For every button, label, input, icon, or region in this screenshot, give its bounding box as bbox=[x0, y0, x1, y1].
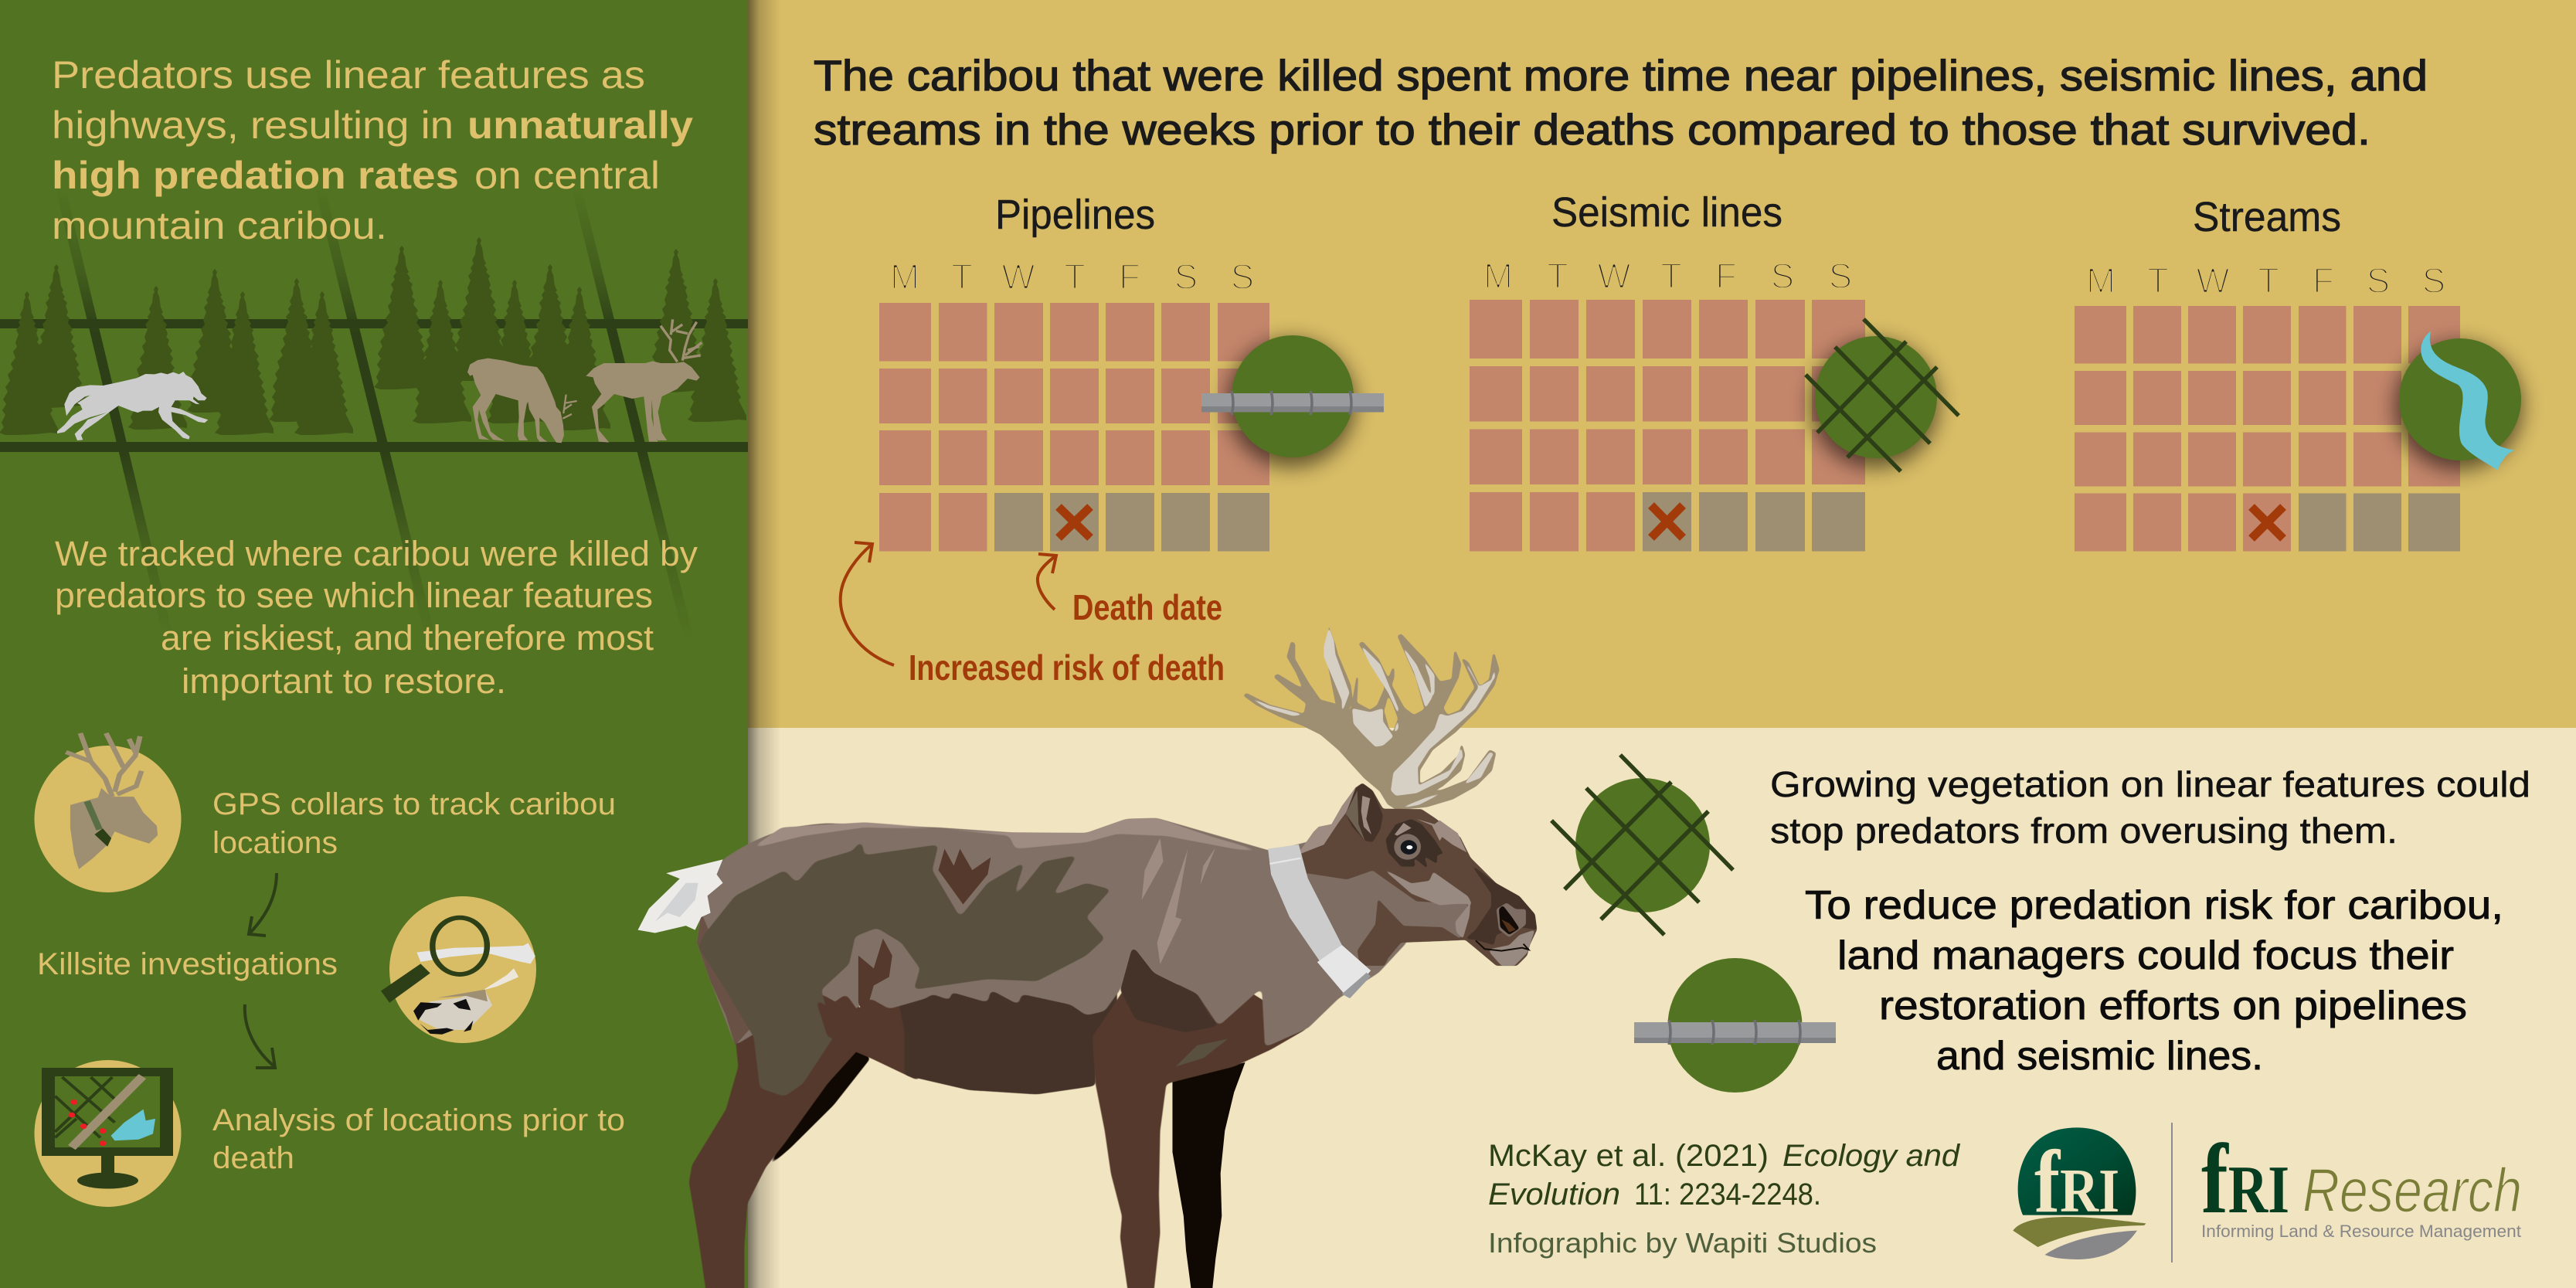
icon: running wolf bbox=[57, 372, 208, 440]
logo: fRI Research bbox=[2013, 1123, 2522, 1263]
icon: standing caribou bbox=[586, 319, 702, 443]
death date X bbox=[2251, 507, 2283, 539]
icon: pipeline circle bbox=[1201, 335, 1384, 467]
text block: predators use linear features: Predators use linear features as bbox=[52, 53, 645, 97]
weekday labels: W bbox=[2196, 260, 2230, 301]
heading: results statement bbox=[814, 51, 2428, 154]
background: green methods panel bbox=[0, 0, 748, 1288]
weekday labels: M bbox=[2086, 260, 2116, 301]
text block: we tracked where caribou were killed bbox=[55, 534, 698, 701]
text block: to reduce predation risk bbox=[1805, 883, 2503, 1079]
logo wordmark bbox=[2201, 1123, 2522, 1241]
icon: spruce trees bbox=[0, 237, 746, 435]
text block: predators use linear features: on central bbox=[474, 154, 660, 197]
weekday labels: T bbox=[1660, 256, 1682, 296]
callout: death date bbox=[1038, 554, 1222, 627]
weekday labels: F bbox=[2313, 260, 2334, 301]
arrow: collars to killsite bbox=[249, 873, 277, 936]
logo emblem bbox=[2013, 1127, 2146, 1259]
weekday labels: W bbox=[1597, 256, 1631, 296]
calendar grid bbox=[1470, 300, 1865, 552]
logo wordmark: Informing Land & Resource Management bbox=[2201, 1222, 2521, 1241]
weekday labels: S bbox=[1231, 257, 1254, 297]
text block: predators use linear features: unnaturally bbox=[467, 104, 693, 147]
text: analysis of locations bbox=[212, 1103, 625, 1175]
credit: Infographic by Wapiti Studios bbox=[1488, 1227, 1877, 1259]
weekday labels bbox=[1483, 256, 1852, 296]
death date X bbox=[1059, 507, 1090, 538]
text: GPS collars bbox=[212, 787, 616, 860]
weekday labels: T bbox=[1064, 257, 1086, 297]
weekday labels: S bbox=[2367, 260, 2390, 301]
text block: growing vegetation: Growing vegetation on linear features could bbox=[1770, 764, 2530, 804]
text block: we tracked where caribou were killed: predators to see which linear features bbox=[55, 576, 653, 615]
illustration: collared caribou bbox=[638, 627, 1537, 1288]
icon: seismic lines circle bbox=[1806, 319, 1959, 471]
citation: McKay et al. (2021) bbox=[1488, 1139, 1769, 1173]
heading: streams: Streams bbox=[2193, 194, 2341, 240]
caribou head and antlers bbox=[1244, 627, 1537, 966]
text block: to reduce predation risk: restoration efforts on pipelines bbox=[1879, 984, 2467, 1028]
GPS collar bbox=[1268, 845, 1371, 998]
weekday labels: S bbox=[1174, 257, 1198, 297]
calendar grid bbox=[2075, 306, 2460, 552]
weekday labels: M bbox=[890, 257, 919, 297]
icon: magnifier over bones and skull bbox=[381, 896, 536, 1043]
weekday labels: F bbox=[1119, 257, 1140, 297]
heading: pipelines: Pipelines bbox=[995, 192, 1155, 238]
text block: to reduce predation risk: land managers could focus their bbox=[1837, 933, 2454, 978]
icon: monitor with map in gold circle bbox=[34, 1060, 181, 1207]
background: gold results panel bbox=[748, 0, 2576, 728]
weekday labels: S bbox=[1771, 256, 1794, 296]
text: GPS collars: GPS collars to track caribou bbox=[212, 787, 616, 821]
heading: results statement: The caribou that were killed spent more time near pipelines, seismic lines, and bbox=[814, 51, 2428, 100]
citation: 11: 2234-2248. bbox=[1634, 1178, 1821, 1212]
citation: Ecology and bbox=[1782, 1139, 1961, 1173]
panel: streams calendar bbox=[2075, 194, 2523, 552]
weekday labels: W bbox=[1001, 257, 1035, 297]
panel: seismic lines calendar bbox=[1470, 189, 1959, 552]
weekday labels: T bbox=[951, 257, 973, 297]
text block: predators use linear features: high predation rates bbox=[52, 154, 459, 197]
weekday labels: T bbox=[2258, 260, 2279, 301]
weekday labels bbox=[890, 257, 1254, 297]
weekday labels: T bbox=[2147, 260, 2169, 301]
weekday labels: S bbox=[2422, 260, 2445, 301]
text block: to reduce predation risk: To reduce predation risk for caribou, bbox=[1805, 883, 2503, 928]
death date X bbox=[1651, 505, 1683, 538]
icon: grazing caribou bbox=[467, 359, 577, 443]
background: cream recommendations panel bbox=[748, 728, 2576, 1288]
text block: we tracked where caribou were killed: We tracked where caribou were killed by bbox=[55, 534, 698, 573]
icon: seismic lines restoration circle bbox=[1551, 755, 1733, 935]
callout: increased risk of death: Increased risk of death bbox=[909, 647, 1225, 688]
text block: predators use linear features: mountain caribou. bbox=[52, 204, 387, 247]
weekday labels: S bbox=[1829, 256, 1852, 296]
icon: stream circle bbox=[2394, 331, 2523, 471]
heading: seismic lines: Seismic lines bbox=[1551, 189, 1782, 236]
text block: growing vegetation: stop predators from overusing them. bbox=[1770, 811, 2398, 851]
weekday labels: M bbox=[1483, 256, 1513, 296]
panel: pipelines calendar bbox=[879, 192, 1384, 552]
text: GPS collars: locations bbox=[212, 826, 338, 860]
text block: predators use linear features bbox=[52, 53, 693, 247]
logo emblem: fRI bbox=[2034, 1133, 2119, 1231]
text block: to reduce predation risk: and seismic lines. bbox=[1936, 1034, 2263, 1079]
panel: linear features forest scene bbox=[0, 189, 748, 639]
calendar grid bbox=[879, 303, 1269, 552]
icon: collared caribou in gold circle bbox=[34, 733, 181, 892]
logo wordmark: Research bbox=[2302, 1156, 2522, 1225]
text block: growing vegetation bbox=[1770, 764, 2530, 851]
heading: results statement: streams in the weeks prior to their deaths compared to those that survived. bbox=[814, 105, 2370, 154]
text: analysis of locations: Analysis of locations prior to bbox=[212, 1103, 625, 1137]
arrow: killsite to analysis bbox=[245, 1004, 275, 1068]
logo wordmark: fRI bbox=[2201, 1123, 2289, 1234]
callout: increased risk of death bbox=[841, 542, 1225, 688]
text: analysis of locations: death bbox=[212, 1141, 294, 1175]
text block: we tracked where caribou were killed: are riskiest, and therefore most bbox=[161, 618, 654, 658]
text: killsite investigations: Killsite investigations bbox=[37, 947, 338, 981]
caribou body bbox=[638, 818, 1419, 1288]
text block: predators use linear features: highways, resulting in bbox=[52, 104, 454, 147]
icon: pipeline restoration circle bbox=[1634, 958, 1836, 1093]
citation: Evolution bbox=[1488, 1178, 1620, 1212]
weekday labels bbox=[2086, 260, 2445, 301]
callout: death date: Death date bbox=[1072, 587, 1222, 627]
text block: we tracked where caribou were killed: important to restore. bbox=[182, 661, 506, 701]
weekday labels: T bbox=[1547, 256, 1568, 296]
weekday labels: F bbox=[1715, 256, 1737, 296]
citation bbox=[1488, 1139, 1961, 1212]
